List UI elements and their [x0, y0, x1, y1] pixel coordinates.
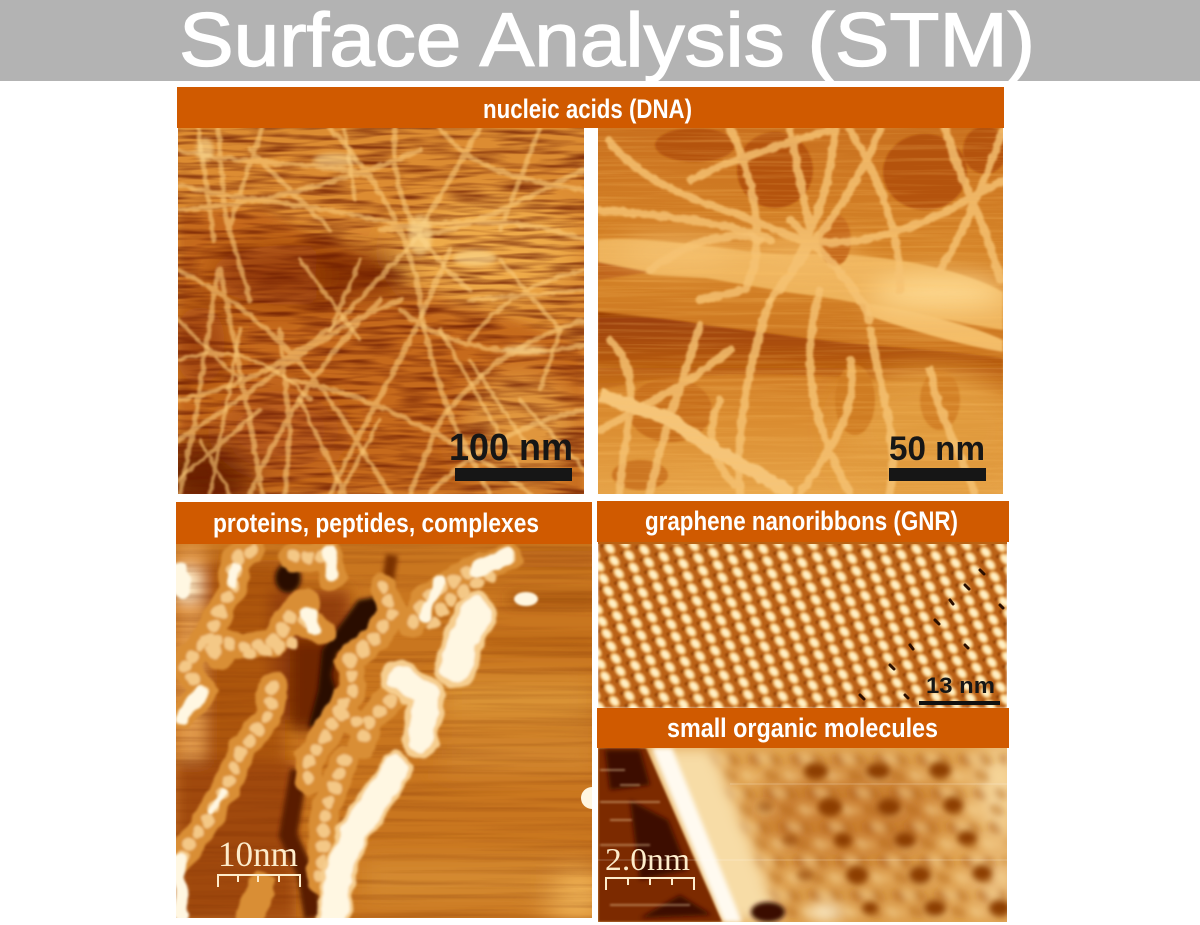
scale label: 13 nm [919, 673, 1000, 705]
scale label: 2.0nm [605, 841, 694, 890]
heading: small organic molecules: small organic molecules [667, 713, 938, 743]
terraces [598, 239, 1003, 395]
scale label: 50 nm: 50 nm [889, 430, 985, 468]
image: molecule lattice [598, 740, 1025, 922]
panel: nucleic acids (DNA) [155, 87, 1020, 510]
heading: proteins: proteins, peptides, complexes [213, 508, 539, 538]
lattice vacancies [757, 762, 1011, 916]
panel: graphene nanoribbons (GNR) [597, 501, 1009, 708]
title band [0, 0, 1200, 83]
panel: proteins, peptides, complexes [176, 502, 610, 925]
DNA bundles [598, 128, 1003, 494]
heading: small organic molecules [597, 708, 1009, 748]
panel: small organic molecules [597, 708, 1025, 922]
heading: proteins [176, 502, 592, 544]
image: GNR lattice [598, 542, 1007, 708]
isolated specks [514, 592, 538, 606]
heading: GNR [597, 501, 1009, 542]
image: DNA STM 100 nm [155, 128, 584, 510]
bright clusters [178, 552, 505, 918]
scale label: 10nm: 10nm [218, 834, 298, 874]
dark channels [275, 563, 385, 728]
protein chains [181, 552, 509, 918]
image: DNA STM 50 nm [598, 126, 1020, 494]
DNA strands [178, 128, 584, 494]
scale label: 2.0nm: 2.0nm [605, 841, 690, 877]
heading: GNR: graphene nanoribbons (GNR) [645, 506, 958, 536]
title band: Surface Analysis (STM) [179, 0, 1035, 83]
image: protein STM [176, 544, 610, 925]
heading: nucleic acids: nucleic acids (DNA) [483, 94, 692, 124]
heading: nucleic acids [177, 87, 1004, 128]
scale label: 100 nm: 100 nm [449, 427, 573, 469]
scale label: 13 nm: 13 nm [926, 673, 995, 698]
dark cells [612, 126, 1007, 490]
